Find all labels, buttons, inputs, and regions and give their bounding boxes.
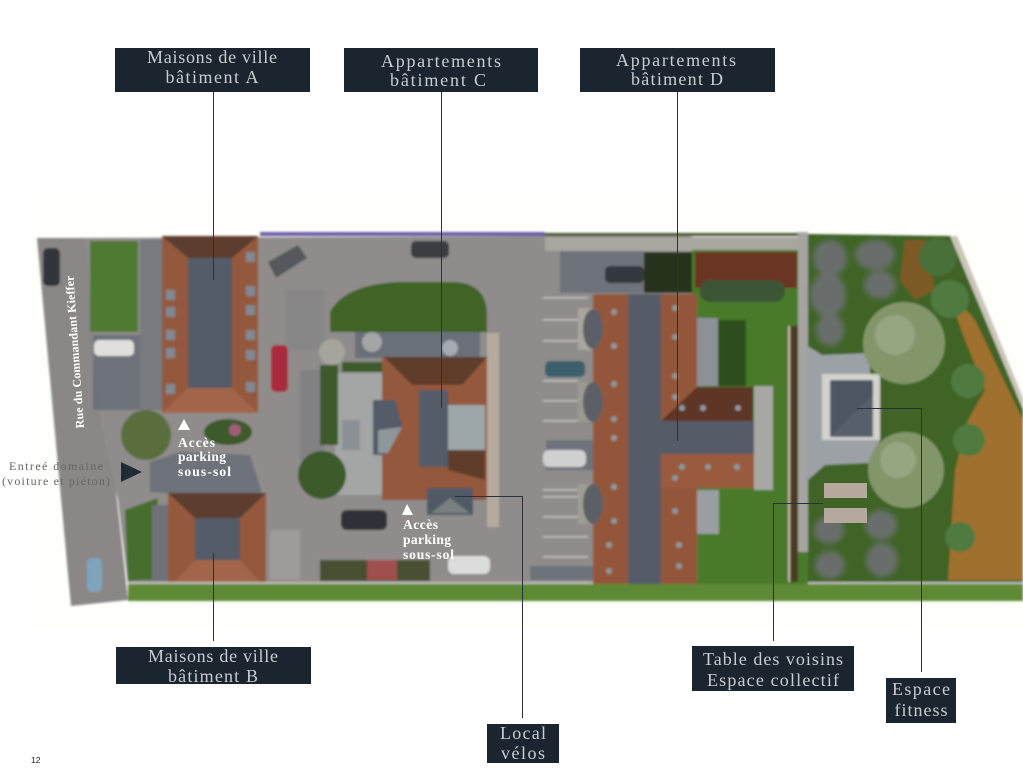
garden path: [798, 232, 808, 552]
building A roof: [162, 236, 258, 413]
label: Maisons de ville batiment B: bâtiment B: [168, 666, 258, 686]
tree at entrance: [121, 410, 171, 460]
aerial site plan: [37, 232, 1023, 606]
label: Appartements batiment D: Appartements: [616, 50, 736, 70]
lower lawn left: [125, 498, 158, 581]
access A: [178, 419, 231, 479]
patio beside building B: [152, 505, 170, 581]
fitness pavement: [806, 345, 880, 480]
red hedge: [695, 252, 797, 288]
terrace of building C: [335, 332, 480, 495]
connector lines: [214, 92, 922, 718]
bottom lawn strip: [128, 584, 1023, 601]
building B roof: [168, 493, 266, 584]
cars: [43, 241, 644, 592]
label: Table des voisins: Table des voisins: [703, 649, 843, 669]
label: Maisons de ville batiment B: [116, 646, 311, 686]
strip right of building C: [487, 333, 499, 527]
label: Espace fitness: Espace: [892, 679, 950, 699]
label: Maisons de ville batiment B: Maisons de ville: [148, 646, 278, 666]
label: Espace fitness: fitness: [894, 700, 948, 720]
terraces of building D east: [697, 318, 773, 534]
curved lawn: [330, 282, 487, 332]
purple hedge: [260, 232, 545, 236]
upper lawn left: [90, 241, 138, 332]
page number: 12: [31, 755, 41, 765]
label: Table des voisins: Espace collectif: [707, 670, 839, 690]
table des voisins markers: [824, 483, 867, 523]
patio beside building A: [140, 240, 163, 410]
access A: Accès: [178, 435, 215, 450]
access C: sous-sol: [403, 547, 454, 562]
entrance caption: Entreé domaine: [9, 459, 103, 473]
fence line: [788, 326, 790, 582]
top green hedge: [545, 233, 800, 236]
label: Table des voisins: [692, 646, 854, 691]
lavender clusters: [810, 240, 898, 579]
street name: Rue du Commandant Kieffer: [62, 274, 87, 429]
fitness building: [822, 374, 880, 440]
orange planting: [945, 285, 1023, 580]
access A: sous-sol: [178, 464, 231, 479]
paved courtyard: [85, 236, 692, 584]
shadows on pavement: [93, 251, 644, 580]
label: Maisons de ville batiment A: [115, 47, 310, 92]
blossom tree: [319, 339, 345, 365]
right garden: [808, 234, 1023, 582]
shrubs: [700, 280, 785, 302]
building C roof: [373, 357, 487, 500]
diagonal boundary: [950, 236, 1023, 410]
label: Appartements batiment C: [344, 48, 538, 92]
label: Appartements batiment D: [580, 48, 775, 92]
terraces of building D west: [578, 308, 603, 524]
label: Local velos: [487, 723, 559, 763]
label: Maisons de ville batiment A: bâtiment A: [166, 67, 258, 87]
label: Local velos: Local: [500, 723, 546, 743]
shaded lawn: [718, 320, 746, 386]
label: Maisons de ville batiment A: Maisons de ville: [147, 47, 277, 67]
central garden: [692, 250, 808, 584]
label: Appartements batiment C: Appartements: [381, 51, 501, 71]
garden fence hedge: [787, 326, 798, 582]
flower bed: [204, 419, 252, 445]
entrance caption: [2, 459, 110, 488]
label: Appartements batiment C: bâtiment C: [390, 70, 486, 90]
entrance caption: (voiture et piéton): [2, 474, 110, 488]
hedge left of building C: [298, 362, 382, 499]
access C: Accès: [403, 517, 438, 532]
top path: [545, 237, 798, 251]
flower hedge: [320, 560, 430, 581]
local velos roof: [427, 488, 473, 515]
label: Local velos: vélos: [501, 743, 545, 763]
icon: entrance arrow: [121, 462, 142, 482]
access C: parking: [403, 532, 451, 547]
label: Appartements batiment D: bâtiment D: [631, 69, 723, 89]
label: Espace fitness: [886, 678, 956, 723]
access C: [402, 504, 454, 562]
access A: parking: [178, 449, 226, 464]
trees: [863, 238, 985, 552]
upper orange planting: [900, 240, 935, 300]
street: [37, 238, 128, 606]
parking shelter: [644, 252, 692, 293]
building D roof: [593, 294, 755, 584]
parking markings: [128, 297, 1023, 584]
